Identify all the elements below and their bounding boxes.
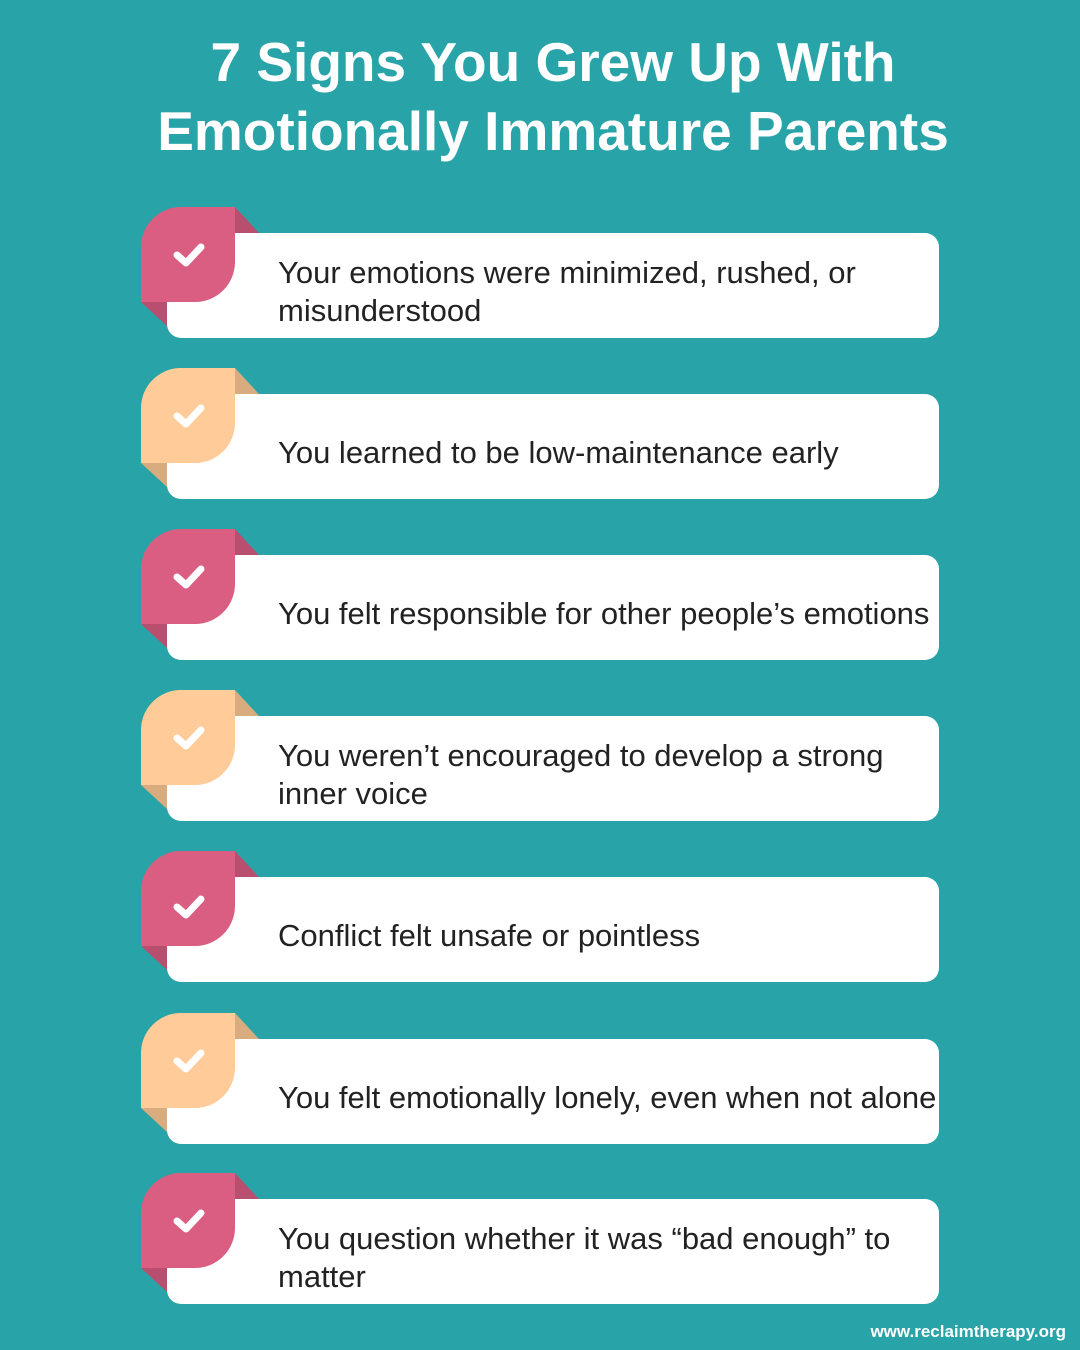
badge 4 <box>141 690 259 809</box>
card 2 <box>167 394 939 499</box>
item 1 <box>141 207 939 338</box>
card 4 <box>167 716 939 821</box>
card 1: misunderstood <box>278 292 481 328</box>
card 1 <box>167 233 939 338</box>
card 3: You felt responsible for other people’s emotions <box>278 596 929 630</box>
card 4: inner voice <box>278 776 428 810</box>
title: Emotionally Immature Parents <box>157 100 949 162</box>
card 5 <box>167 877 939 982</box>
badge 3 <box>141 529 259 648</box>
item 3 <box>141 529 939 660</box>
card 6 <box>167 1039 939 1144</box>
title <box>157 31 949 162</box>
badge 6 <box>141 1013 259 1132</box>
card 2: You learned to be low-maintenance early <box>278 434 839 470</box>
card 6: You felt emotionally lonely, even when not alone <box>278 1080 936 1114</box>
item 2 <box>141 368 939 499</box>
item 4 <box>141 690 939 821</box>
badge 2 <box>141 368 259 487</box>
badge 1 <box>141 207 259 326</box>
badge 7 <box>141 1173 259 1292</box>
item 7 <box>141 1173 939 1304</box>
card 5: Conflict felt unsafe or pointless <box>278 918 700 952</box>
badge 5 <box>141 851 259 970</box>
card 3 <box>167 555 939 660</box>
card 7: You question whether it was “bad enough” to <box>278 1220 890 1256</box>
card 7: matter <box>278 1258 366 1294</box>
item 6 <box>141 1013 939 1144</box>
item 5 <box>141 851 939 982</box>
footer url: www.reclaimtherapy.org <box>870 1322 1066 1341</box>
card 7 <box>167 1199 939 1304</box>
card 1: Your emotions were minimized, rushed, or <box>278 254 856 290</box>
card 4: You weren’t encouraged to develop a strong <box>278 738 884 772</box>
title: 7 Signs You Grew Up With <box>210 31 896 93</box>
